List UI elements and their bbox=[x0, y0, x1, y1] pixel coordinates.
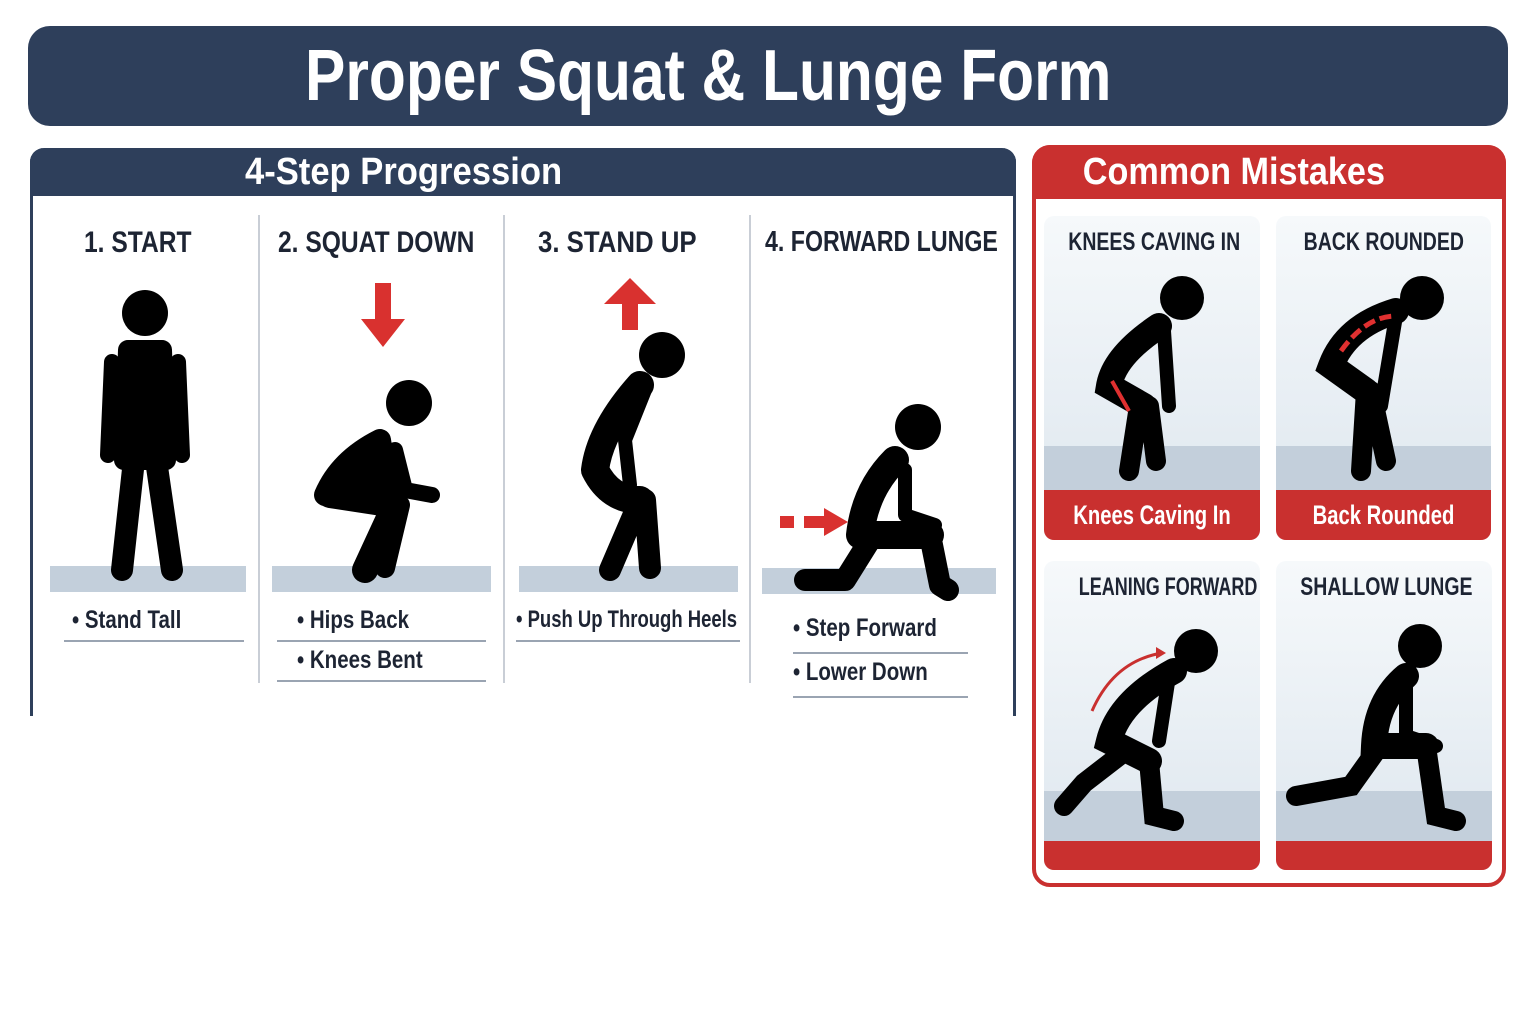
card: back rounded bbox=[1276, 216, 1491, 540]
title: Proper Squat & Lunge Form bbox=[305, 36, 1111, 116]
bullets step 2 bbox=[277, 606, 486, 682]
step 1 heading: 1. START bbox=[84, 226, 192, 259]
card: back rounded: Back Rounded bbox=[1313, 500, 1454, 530]
bullets step 2: • Knees Bent bbox=[297, 646, 423, 674]
icon: standing figure bbox=[108, 290, 182, 570]
mistakes header bbox=[1032, 145, 1506, 199]
panel: 4-step progression bbox=[30, 148, 1016, 716]
bullets step 1 bbox=[64, 602, 244, 642]
card: leaning forward: LEANING FORWARD bbox=[1079, 573, 1257, 601]
figures svg bbox=[100, 278, 959, 601]
card: shallow lunge bbox=[1276, 561, 1492, 870]
bullets step 1: • Stand Tall bbox=[72, 606, 181, 634]
bullets step 4: • Lower Down bbox=[793, 658, 928, 686]
bullets step 4: • Step Forward bbox=[793, 614, 937, 642]
panel header bbox=[30, 148, 1016, 196]
step 3 heading: 3. STAND UP bbox=[538, 226, 697, 259]
arrow: right dashed bbox=[780, 508, 848, 536]
bullets step 4 bbox=[793, 614, 968, 698]
card: shallow lunge: SHALLOW LUNGE bbox=[1300, 573, 1473, 601]
bullets step 2: • Hips Back bbox=[297, 606, 409, 634]
card: knees caving in bbox=[1044, 216, 1260, 540]
arrow: up bbox=[604, 278, 656, 330]
arrow: down bbox=[361, 283, 405, 347]
bullets step 3: • Push Up Through Heels bbox=[516, 606, 737, 633]
card: back rounded: BACK ROUNDED bbox=[1303, 228, 1464, 256]
step 4 heading: 4. FORWARD LUNGE bbox=[765, 226, 998, 258]
title bbox=[28, 26, 1508, 126]
mistakes header: Common Mistakes bbox=[1083, 151, 1385, 193]
step 2 heading: 2. SQUAT DOWN bbox=[278, 226, 474, 259]
card: knees caving in: KNEES CAVING IN bbox=[1068, 228, 1240, 256]
bullets step 3 bbox=[516, 602, 740, 642]
icon: stand up figure bbox=[595, 332, 685, 570]
card: leaning forward bbox=[1044, 561, 1260, 870]
icon: squat figure bbox=[325, 380, 432, 570]
card: knees caving in: Knees Caving In bbox=[1073, 500, 1231, 530]
panel: common mistakes bbox=[1032, 145, 1506, 887]
panel header: 4-Step Progression bbox=[245, 151, 562, 193]
icon: lunge figure bbox=[805, 404, 948, 590]
